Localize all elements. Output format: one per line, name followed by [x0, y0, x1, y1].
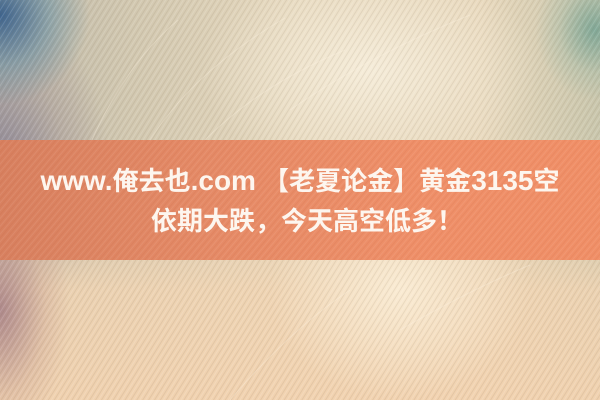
headline line 2: 依期大跌，今天高空低多！	[151, 206, 463, 236]
headline line 1: www.俺去也.com 【老夏论金】黄金3135空	[40, 165, 560, 196]
lower warm background wash	[0, 200, 600, 400]
band diagonal texture	[0, 140, 600, 260]
orange title band	[0, 140, 600, 260]
headline text	[40, 165, 560, 236]
